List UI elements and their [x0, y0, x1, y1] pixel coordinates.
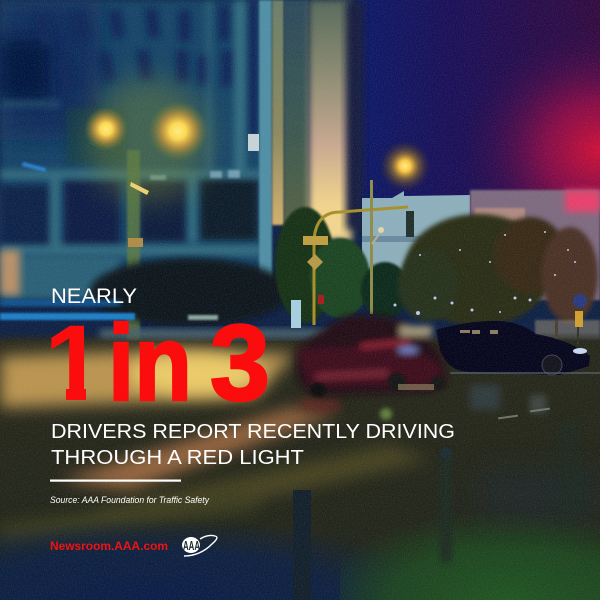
- headline: 1 in 3: 1: [44, 302, 104, 423]
- headline: 1 in 3: in: [108, 302, 192, 423]
- left street lights glow: [22, 78, 259, 340]
- red moving car: [296, 315, 447, 397]
- night sky with red glow: [346, 0, 600, 275]
- black car: [436, 321, 600, 375]
- lower dark windows: [0, 108, 258, 247]
- lower window sky reflections: [150, 170, 240, 180]
- tower column: [259, 0, 352, 290]
- text: drivers report statement: [51, 421, 455, 469]
- signal pole and traffic light: [291, 140, 431, 328]
- road streaks: [0, 445, 430, 545]
- green lower right: [340, 480, 600, 600]
- website link: Newsroom.AAA.com: [50, 539, 168, 553]
- building facade: left office block with window grid: [0, 0, 265, 270]
- distant buildings: [362, 190, 600, 300]
- divider rule: [50, 480, 181, 482]
- window frames: [0, 0, 262, 256]
- headline: 1 in 3: 3: [210, 302, 270, 423]
- headline: 1 in 3: [51, 320, 268, 402]
- AAA logo: AAA: [183, 538, 200, 553]
- road surface: [0, 329, 600, 600]
- trees: [275, 207, 600, 340]
- navy lower left: [0, 490, 420, 600]
- source note: Source: AAA Foundation for Traffic Safety: [50, 495, 209, 505]
- dark hedge and street edge left: [0, 250, 290, 326]
- text: drivers report statement: DRIVERS REPORT RECENTLY DRIVING: [51, 421, 455, 443]
- right sign post: [555, 294, 587, 345]
- text: NEARLY: NEARLY: [51, 285, 137, 308]
- text: drivers report statement: THROUGH A RED LIGHT: [51, 447, 304, 469]
- AAA logo: [182, 535, 217, 556]
